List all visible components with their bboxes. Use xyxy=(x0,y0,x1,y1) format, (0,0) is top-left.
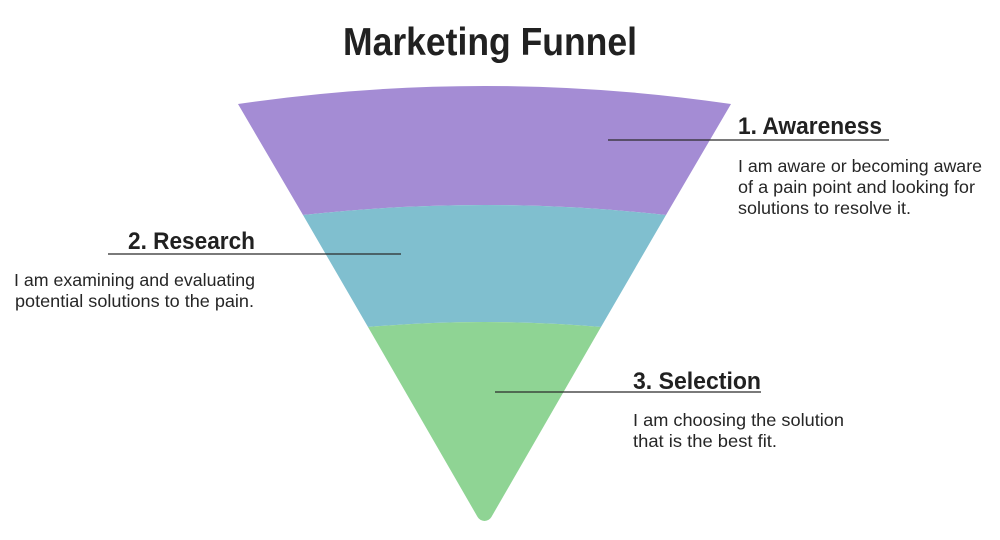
description: of a pain point and looking for xyxy=(738,177,975,197)
heading: 1. Awareness xyxy=(738,113,882,140)
description: I am choosing the solution xyxy=(633,410,844,430)
description: I am examining and evaluating xyxy=(14,270,255,290)
funnel chart xyxy=(238,86,731,521)
heading: 2. Research xyxy=(128,228,255,255)
leader line xyxy=(108,253,401,255)
funnel stage: awareness xyxy=(238,86,731,215)
label: 1. Awareness xyxy=(608,113,982,218)
description: solutions to resolve it. xyxy=(738,198,911,218)
label: 3. Selection xyxy=(495,368,844,451)
description: that is the best fit. xyxy=(633,431,777,451)
description: I am aware or becoming aware xyxy=(738,156,982,176)
title: Marketing Funnel xyxy=(343,21,637,64)
leader line xyxy=(495,391,761,393)
funnel stage: research xyxy=(303,205,666,327)
description: potential solutions to the pain. xyxy=(15,291,254,311)
funnel stage: selection xyxy=(368,322,601,521)
heading: 3. Selection xyxy=(633,368,761,395)
leader line xyxy=(608,139,889,141)
label: 2. Research xyxy=(14,228,401,311)
